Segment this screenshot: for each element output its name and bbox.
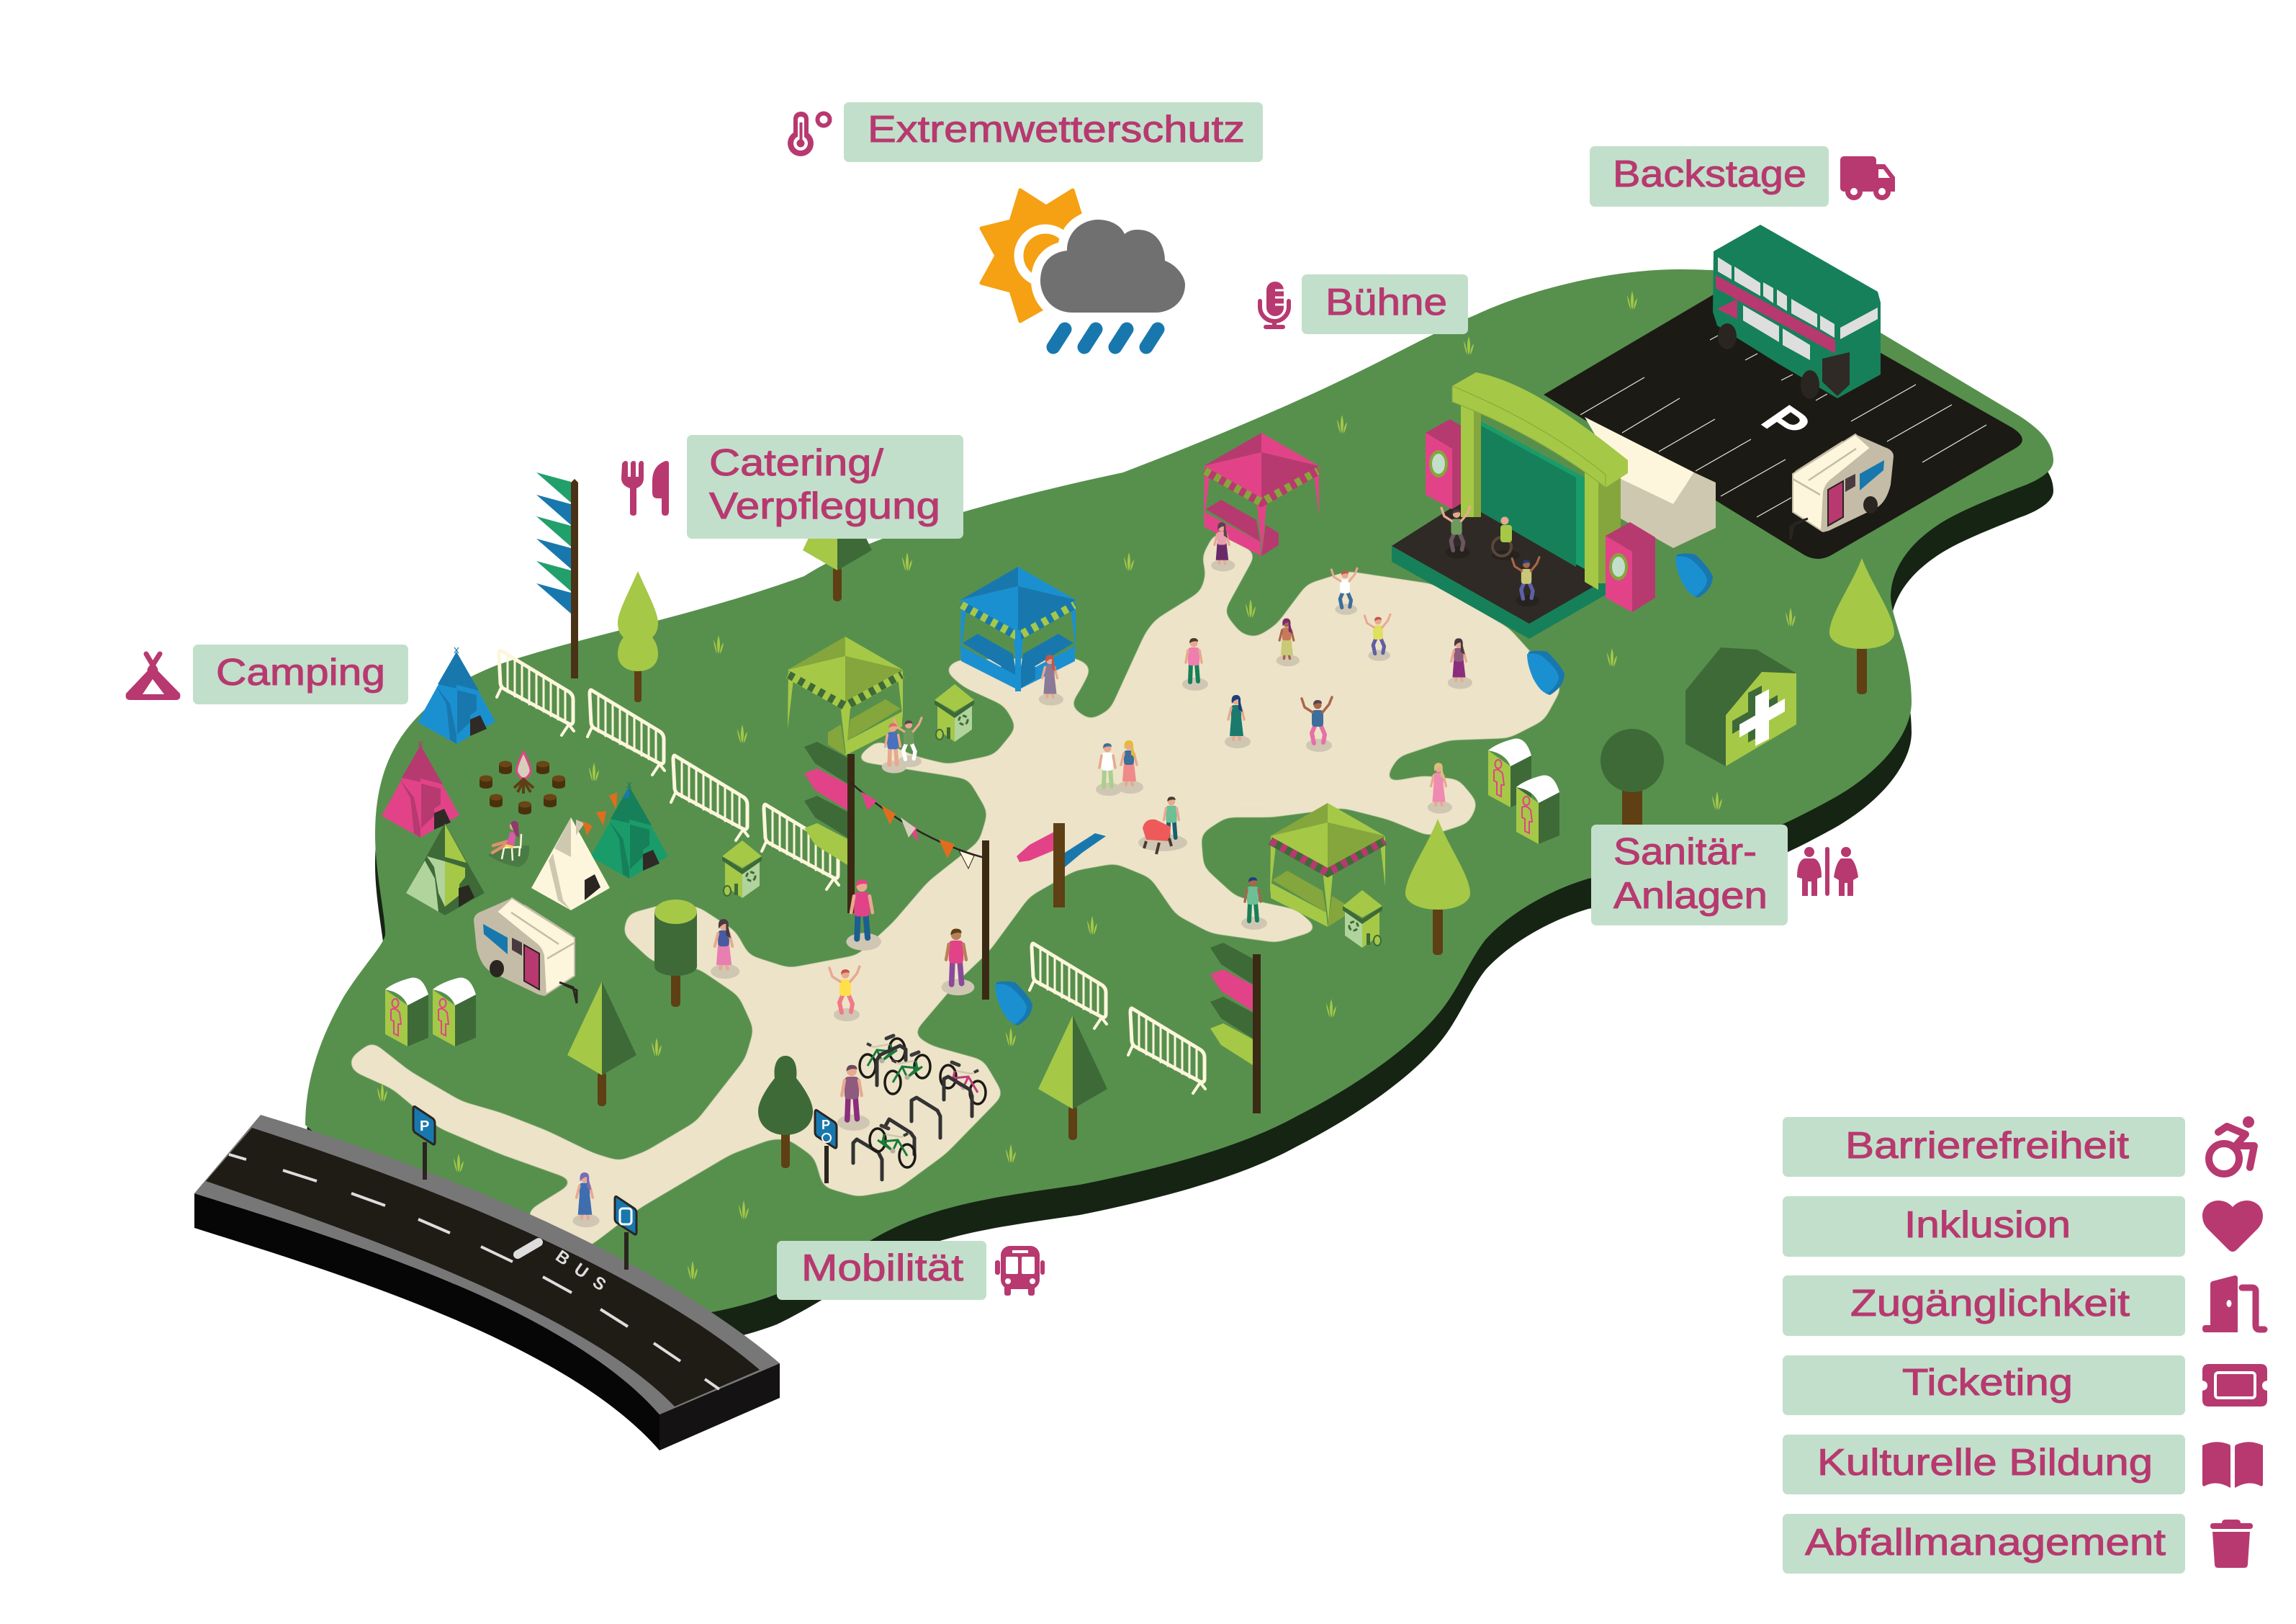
pink tent xyxy=(382,741,459,838)
stroller with parent xyxy=(1138,797,1187,854)
footpaths xyxy=(349,531,1562,1268)
icon: tent xyxy=(126,654,180,700)
water shield field xyxy=(1527,651,1565,695)
label: Extremwetterschutz: Extremwetterschutz xyxy=(868,109,1245,151)
bunting xyxy=(851,783,984,869)
label: Bühne: Bühne xyxy=(1325,282,1447,323)
parking sign: P xyxy=(420,1118,429,1134)
visitors on the field xyxy=(573,522,1472,1227)
label: Sanitär-Anlagen: Sanitär- xyxy=(1613,831,1757,873)
teardrop tree centre xyxy=(1405,819,1470,955)
field toilets xyxy=(1488,738,1559,844)
lime stall left xyxy=(788,637,903,755)
top pine behind label xyxy=(803,477,872,601)
legend item: Inklusion xyxy=(1783,1196,2185,1257)
camp toilets xyxy=(385,977,476,1046)
label: Catering/Verpflegung: Catering/ xyxy=(709,442,884,484)
legend item: Barrierefreiheit xyxy=(1783,1117,2185,1177)
icon: trash can xyxy=(2210,1520,2253,1568)
label: Mobilität: Mobilität xyxy=(801,1247,964,1289)
first aid building xyxy=(1685,647,1796,766)
bus sign xyxy=(615,1196,636,1270)
icon: microphone xyxy=(1260,282,1289,327)
legend item: Barrierefreiheit: Barrierefreiheit xyxy=(1845,1125,2130,1167)
label: Camping xyxy=(193,645,408,704)
legend item: Ticketing: Ticketing xyxy=(1902,1362,2073,1404)
camp bin xyxy=(722,840,762,898)
icon: heart xyxy=(2202,1201,2263,1252)
label: Camping: Camping xyxy=(216,652,385,694)
double-decker bus xyxy=(1713,225,1881,399)
direction signpost xyxy=(1017,823,1106,907)
right caravan xyxy=(1791,434,1894,539)
teal tent xyxy=(590,782,668,879)
teardrop tree upper right xyxy=(1829,558,1894,694)
flag pole with wings xyxy=(804,742,855,913)
label: Extremwetterschutz xyxy=(844,102,1263,162)
weather icon xyxy=(981,190,1185,347)
lime stall right xyxy=(1270,803,1385,927)
legend item: Inklusion: Inklusion xyxy=(1904,1204,2071,1246)
icon: accessible door xyxy=(2202,1275,2264,1332)
stage performers xyxy=(1441,506,1539,606)
three tier tree xyxy=(618,571,658,702)
label: Bühne xyxy=(1302,274,1468,334)
left caravan xyxy=(474,898,577,1003)
bunting pole xyxy=(982,840,989,1000)
island side wall xyxy=(305,300,2053,1343)
label: Sanitär-Anlagen: Anlagen xyxy=(1613,875,1768,917)
legend item: Abfallmanagement: Abfallmanagement xyxy=(1805,1522,2166,1564)
icon: restroom xyxy=(1797,847,1858,896)
cylinder tree xyxy=(654,900,697,1007)
parking sign xyxy=(413,1106,435,1180)
legend item: Zugänglichkeit xyxy=(1783,1275,2185,1336)
icon: ticket xyxy=(2202,1364,2267,1407)
green tent xyxy=(406,823,485,915)
island lawn xyxy=(305,269,2053,1313)
round tree near label xyxy=(1601,729,1664,835)
icon: wheelchair xyxy=(2209,1116,2254,1174)
road lettering: BUS xyxy=(552,1247,618,1301)
flag pole right xyxy=(1210,943,1261,1113)
lower pine xyxy=(1038,1015,1107,1140)
legend xyxy=(1783,1116,2267,1574)
blue stall xyxy=(960,567,1076,691)
blue tent xyxy=(418,647,495,744)
label: Backstage xyxy=(1590,146,1829,207)
legend item: Ticketing xyxy=(1783,1355,2185,1415)
bins xyxy=(935,684,1382,948)
icon: cutlery xyxy=(621,461,669,516)
campfire xyxy=(480,752,565,815)
label: Mobilität xyxy=(777,1241,986,1300)
parking lot xyxy=(1544,276,2022,559)
camp bunting xyxy=(582,792,617,835)
cream tipi xyxy=(531,817,610,910)
icon: truck xyxy=(1840,156,1895,200)
road xyxy=(194,1115,780,1450)
left speaker xyxy=(1426,419,1475,509)
parking letter: P xyxy=(1750,397,1823,448)
bike parking sign: P xyxy=(821,1118,830,1132)
stage xyxy=(1392,372,1655,639)
pink stall xyxy=(1204,433,1319,556)
right speaker xyxy=(1606,522,1655,612)
label: Sanitär-Anlagen xyxy=(1591,825,1788,925)
label: Catering/Verpflegung xyxy=(687,435,963,539)
icon: open book xyxy=(2202,1442,2263,1488)
pennant pole xyxy=(536,472,578,678)
grass tufts xyxy=(377,291,1796,1280)
label: Catering/Verpflegung: Verpflegung xyxy=(709,485,940,527)
legend item: Abfallmanagement xyxy=(1783,1514,2185,1574)
dark tiered tree xyxy=(758,1056,813,1168)
barriers xyxy=(497,650,1205,1093)
label: Backstage: Backstage xyxy=(1613,153,1806,195)
camp pine xyxy=(567,982,636,1106)
sitting woman xyxy=(488,821,529,867)
icon: thermometer xyxy=(788,112,829,156)
legend item: Kulturelle Bildung: Kulturelle Bildung xyxy=(1817,1442,2153,1484)
legend item: Zugänglichkeit: Zugänglichkeit xyxy=(1850,1283,2130,1324)
cream backstage building xyxy=(1585,417,1716,548)
water shield lower xyxy=(995,981,1032,1026)
icon: bus xyxy=(995,1246,1045,1296)
water shield stage xyxy=(1675,553,1713,598)
legend item: Kulturelle Bildung xyxy=(1783,1435,2185,1494)
bicycle parking xyxy=(853,1036,986,1180)
bike parking sign xyxy=(815,1110,837,1183)
